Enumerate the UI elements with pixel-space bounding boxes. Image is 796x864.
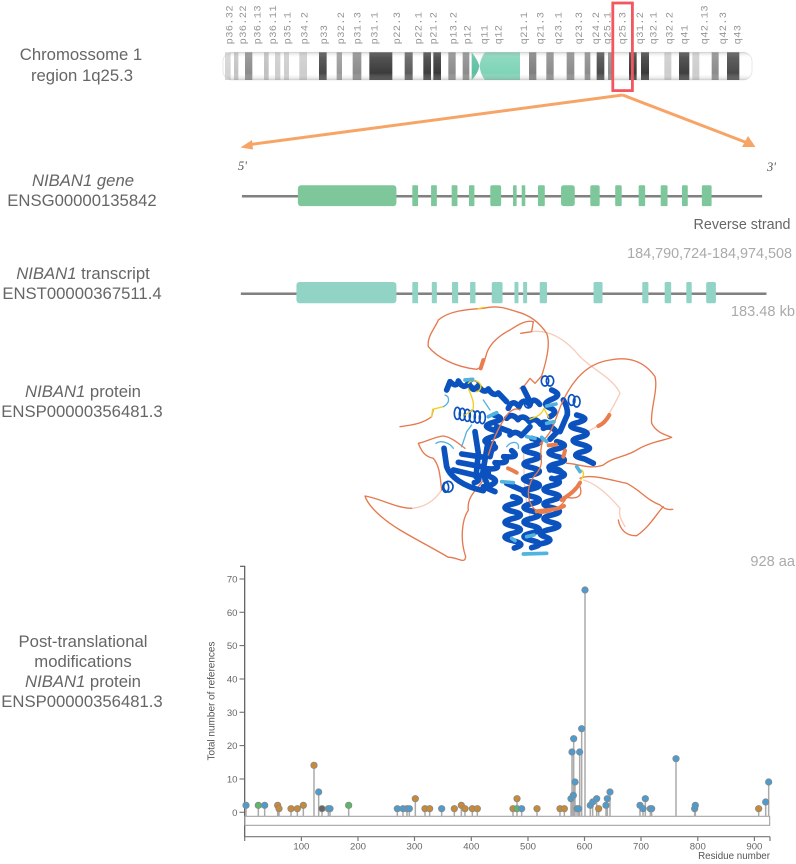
y axis: 30 bbox=[227, 708, 238, 719]
y axis: 70 bbox=[227, 574, 238, 586]
upper helices bbox=[447, 381, 507, 402]
gene track bbox=[242, 185, 762, 206]
band labels q arm bbox=[519, 5, 744, 44]
label: gene: NIBAN1 gene bbox=[32, 171, 134, 190]
3 prime label: 3' bbox=[766, 160, 776, 174]
x axis labels bbox=[293, 842, 762, 852]
label: gene: ENSG00000135842 bbox=[7, 191, 157, 210]
band labels p arm: p36.22 bbox=[238, 5, 250, 44]
band labels q arm: q32.2 bbox=[664, 12, 676, 44]
chromosome 1 ideogram bbox=[223, 5, 752, 80]
x axis labels: 500 bbox=[520, 842, 536, 852]
band labels p arm: p12 bbox=[463, 25, 475, 44]
label: gene bbox=[7, 171, 157, 210]
band labels p arm: p22.1 bbox=[414, 12, 426, 44]
band labels p arm: p13.2 bbox=[448, 12, 460, 44]
label: protein: ENSP00000356481.3 bbox=[1, 402, 163, 421]
label: post-translational modifications: NIBAN1 protein bbox=[25, 672, 141, 691]
p-arm bands bbox=[225, 52, 510, 80]
label: post-translational modifications: modifications bbox=[34, 652, 132, 671]
y axis: 60 bbox=[227, 608, 238, 619]
transcript track bbox=[241, 282, 766, 303]
x axis labels: 400 bbox=[463, 842, 479, 852]
y axis: 10 bbox=[227, 774, 238, 786]
x axis labels: 800 bbox=[690, 842, 706, 852]
band labels q arm: q41 bbox=[679, 25, 691, 44]
band labels p arm: p31.1 bbox=[369, 12, 381, 44]
label: protein bbox=[1, 382, 163, 421]
label: post-translational modifications: Post-translational bbox=[19, 632, 147, 651]
band labels q arm: q25.3 bbox=[617, 12, 629, 44]
transcript length: 183.48 kb bbox=[731, 304, 795, 320]
highlight box: region 1q25.3 bbox=[613, 3, 632, 91]
light blue segments bbox=[465, 379, 580, 554]
protein track bbox=[245, 816, 770, 841]
x axis labels: 700 bbox=[633, 842, 649, 852]
band labels p arm: p33 bbox=[319, 25, 331, 44]
y axis: 20 bbox=[227, 741, 238, 752]
label: transcript: NIBAN1 transcript bbox=[16, 264, 150, 283]
lollipop chart: post-translational modifications bbox=[206, 566, 772, 862]
band labels q arm: q31.2 bbox=[635, 12, 647, 44]
band labels p arm: p31.3 bbox=[352, 12, 364, 44]
disordered coils bbox=[365, 307, 673, 560]
band labels p arm: p34.2 bbox=[299, 12, 311, 44]
band labels p arm: q11 bbox=[480, 25, 492, 44]
alpha helices bbox=[447, 381, 593, 548]
band labels p arm: p36.32 bbox=[225, 5, 237, 44]
zoom arrows bbox=[240, 95, 756, 150]
band labels q arm: q25.1 bbox=[603, 12, 615, 44]
band labels p arm: p21.2 bbox=[429, 12, 441, 44]
band labels p arm: q12 bbox=[493, 25, 505, 44]
x axis labels: 600 bbox=[576, 842, 593, 852]
band labels q arm: q42.3 bbox=[718, 12, 730, 44]
label: chromosome region bbox=[20, 45, 142, 85]
y axis: 40 bbox=[227, 674, 238, 686]
x axis labels: 300 bbox=[406, 842, 423, 852]
band labels p arm: p36.13 bbox=[252, 5, 264, 44]
band labels q arm: q23.1 bbox=[554, 12, 566, 44]
band labels q arm: q21.3 bbox=[536, 12, 548, 44]
label: chromosome region: Chromossome 1 bbox=[20, 45, 142, 64]
band labels q arm: q23.3 bbox=[574, 12, 586, 44]
label: post-translational modifications bbox=[1, 632, 163, 711]
band labels p arm: p32.2 bbox=[336, 12, 348, 44]
label: transcript: ENST00000367511.4 bbox=[2, 284, 162, 303]
middle helices bbox=[549, 442, 564, 478]
label: transcript bbox=[2, 264, 162, 303]
band labels q arm: q42.13 bbox=[699, 5, 711, 44]
y axis: 0 bbox=[232, 808, 238, 819]
label: protein: NIBAN1 protein bbox=[25, 382, 141, 401]
band labels q arm: q24.2 bbox=[591, 12, 603, 44]
y axis bbox=[227, 566, 245, 837]
lollipops: residues below 450 bbox=[243, 762, 481, 816]
band labels q arm: q43 bbox=[732, 25, 744, 44]
bottom helix bundle bbox=[505, 497, 521, 548]
coils over the core bbox=[488, 400, 581, 513]
yellow segments bbox=[432, 307, 584, 480]
x axis labels: 100 bbox=[293, 842, 309, 852]
label: chromosome region: region 1q25.3 bbox=[31, 66, 133, 85]
protein length: 928 aa bbox=[750, 554, 796, 570]
band labels p arm bbox=[225, 5, 505, 44]
y axis title: Total number of references bbox=[206, 642, 218, 760]
faded coils bbox=[412, 331, 625, 527]
helix rings bbox=[443, 376, 580, 492]
thick orange segments bbox=[481, 360, 609, 511]
y axis: 50 bbox=[227, 641, 238, 652]
band labels p arm: p35.1 bbox=[283, 12, 295, 44]
lollipops: residues above 450 bbox=[510, 587, 772, 816]
q-arm bands bbox=[490, 52, 739, 80]
protein structure bbox=[365, 307, 673, 560]
band labels q arm: q21.1 bbox=[519, 12, 531, 44]
band labels q arm: q32.1 bbox=[649, 12, 661, 44]
5 prime label: 5' bbox=[238, 159, 247, 173]
label: post-translational modifications: ENSP00000356481.3 bbox=[1, 692, 163, 711]
x axis labels: 900 bbox=[746, 842, 762, 852]
x axis labels: 200 bbox=[350, 842, 366, 852]
genomic coordinates: 184,790,724-184,974,508 bbox=[627, 246, 792, 262]
band labels p arm: p36.11 bbox=[268, 5, 280, 44]
strand note: Reverse strand bbox=[694, 217, 791, 233]
x axis title: Residue number bbox=[698, 851, 771, 862]
beta sheet bbox=[444, 432, 495, 492]
band labels p arm: p22.3 bbox=[392, 12, 404, 44]
